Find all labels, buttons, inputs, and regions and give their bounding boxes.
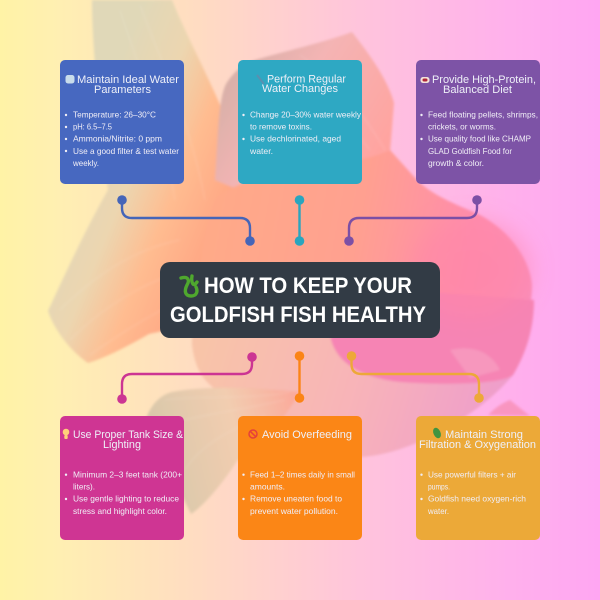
bullet list: stress and highlight color. [73, 507, 167, 516]
bullet list: Remove uneaten food to [250, 494, 342, 504]
bullet list: growth & color. [428, 159, 484, 168]
bullet list: pH: 6.5–7.5 [73, 122, 112, 132]
panel: proper tank size and lighting [60, 416, 184, 540]
icon: prohibited [249, 430, 257, 438]
bullet list: Use gentle lighting to reduce [73, 494, 179, 504]
bullet list: Change 20–30% water weekly [250, 110, 362, 120]
icon: water block [66, 75, 74, 84]
heading [73, 429, 184, 451]
icon: light bulb [63, 429, 69, 439]
bullet list: Feed floating pellets, shrimps, [428, 110, 538, 120]
bullet list: Feed 1–2 times daily in small [250, 470, 355, 479]
connector: tank to title [117, 352, 257, 404]
bullet list: crickets, or worms. [428, 122, 496, 132]
heading: GOLDFISH FISH HEALTHY [170, 302, 426, 327]
bullet list: pumps. [428, 482, 450, 491]
body [198, 150, 532, 385]
bullet list: Use dechlorinated, aged [250, 135, 341, 144]
bullet list: Use powerful filters + air [428, 470, 516, 479]
icon: meat [420, 77, 430, 83]
bullet list: liters). [73, 482, 95, 491]
heading: Lighting [103, 439, 141, 451]
title banner [160, 262, 440, 338]
bullet list: to remove toxins. [250, 122, 312, 132]
head pink glow [330, 290, 534, 384]
heading: Provide High-Protein, [432, 74, 536, 86]
heading [419, 429, 536, 451]
connector: filtration to title [347, 351, 484, 403]
rear fin [488, 400, 530, 416]
bullet list: GLAD Goldfish Food for [428, 147, 512, 156]
bullet list [242, 470, 355, 516]
heading: Water Changes [262, 83, 339, 95]
bullet list [420, 470, 526, 516]
heading: Filtration & Oxygenation [419, 439, 536, 451]
bullet list [65, 110, 179, 168]
heading [262, 74, 346, 95]
bullet list: Temperature: 26–30°C [73, 110, 156, 120]
heading: HOW TO KEEP YOUR [204, 273, 412, 298]
cheek glow [410, 220, 530, 320]
icon: leaf [432, 427, 442, 439]
tail fin [48, 0, 249, 363]
heading: Balanced Diet [443, 84, 512, 96]
heading: Maintain Ideal Water [77, 74, 179, 86]
heading: Parameters [94, 84, 152, 96]
heading: Maintain Strong [445, 429, 523, 441]
bullet list [242, 110, 362, 156]
goldfish photo backdrop [48, 0, 534, 514]
panel: perform regular water changes [238, 60, 362, 184]
lower body [192, 305, 534, 457]
ventral fin [145, 388, 300, 514]
heading: Perform Regular [267, 74, 346, 86]
panel: maintain ideal water parameters [60, 60, 184, 184]
heading [432, 74, 536, 96]
bullet list: Minimum 2–3 feet tank (200+ [73, 470, 182, 479]
icon: wrench [257, 75, 264, 84]
icon: dragon [181, 276, 197, 296]
bullet list: Use quality food like CHAMP [428, 135, 532, 144]
bullet list [420, 110, 538, 168]
heading [77, 74, 179, 96]
fin rays [60, 5, 385, 470]
panel: avoid overfeeding [238, 416, 362, 540]
connector: water changes to title [295, 195, 304, 246]
dorsal fin [215, 32, 394, 215]
heading: Use Proper Tank Size & [73, 429, 184, 441]
heading: Avoid Overfeeding [262, 429, 352, 441]
bullet list: Ammonia/Nitrite: 0 ppm [73, 135, 162, 144]
bullet list: Goldfish need oxygen-rich [428, 494, 526, 504]
panel: strong filtration and oxygenation [416, 416, 540, 540]
connector: overfeeding to title [295, 351, 304, 403]
connector: diet to title [344, 195, 482, 246]
inner pale ridge on head [450, 348, 500, 378]
bullet list: prevent water pollution. [250, 507, 338, 516]
icon detail: meat centre [422, 78, 428, 82]
bullet list [65, 470, 182, 516]
bullet list: water. [427, 507, 449, 516]
panel: high-protein balanced diet [416, 60, 540, 184]
bullet list: water. [249, 147, 273, 156]
bullet list: amounts. [250, 482, 285, 491]
bullet list: weekly. [72, 159, 99, 168]
connector: water parameters to title [117, 195, 255, 246]
heading [170, 273, 426, 327]
bullet list: Use a good filter & test water [73, 147, 179, 156]
